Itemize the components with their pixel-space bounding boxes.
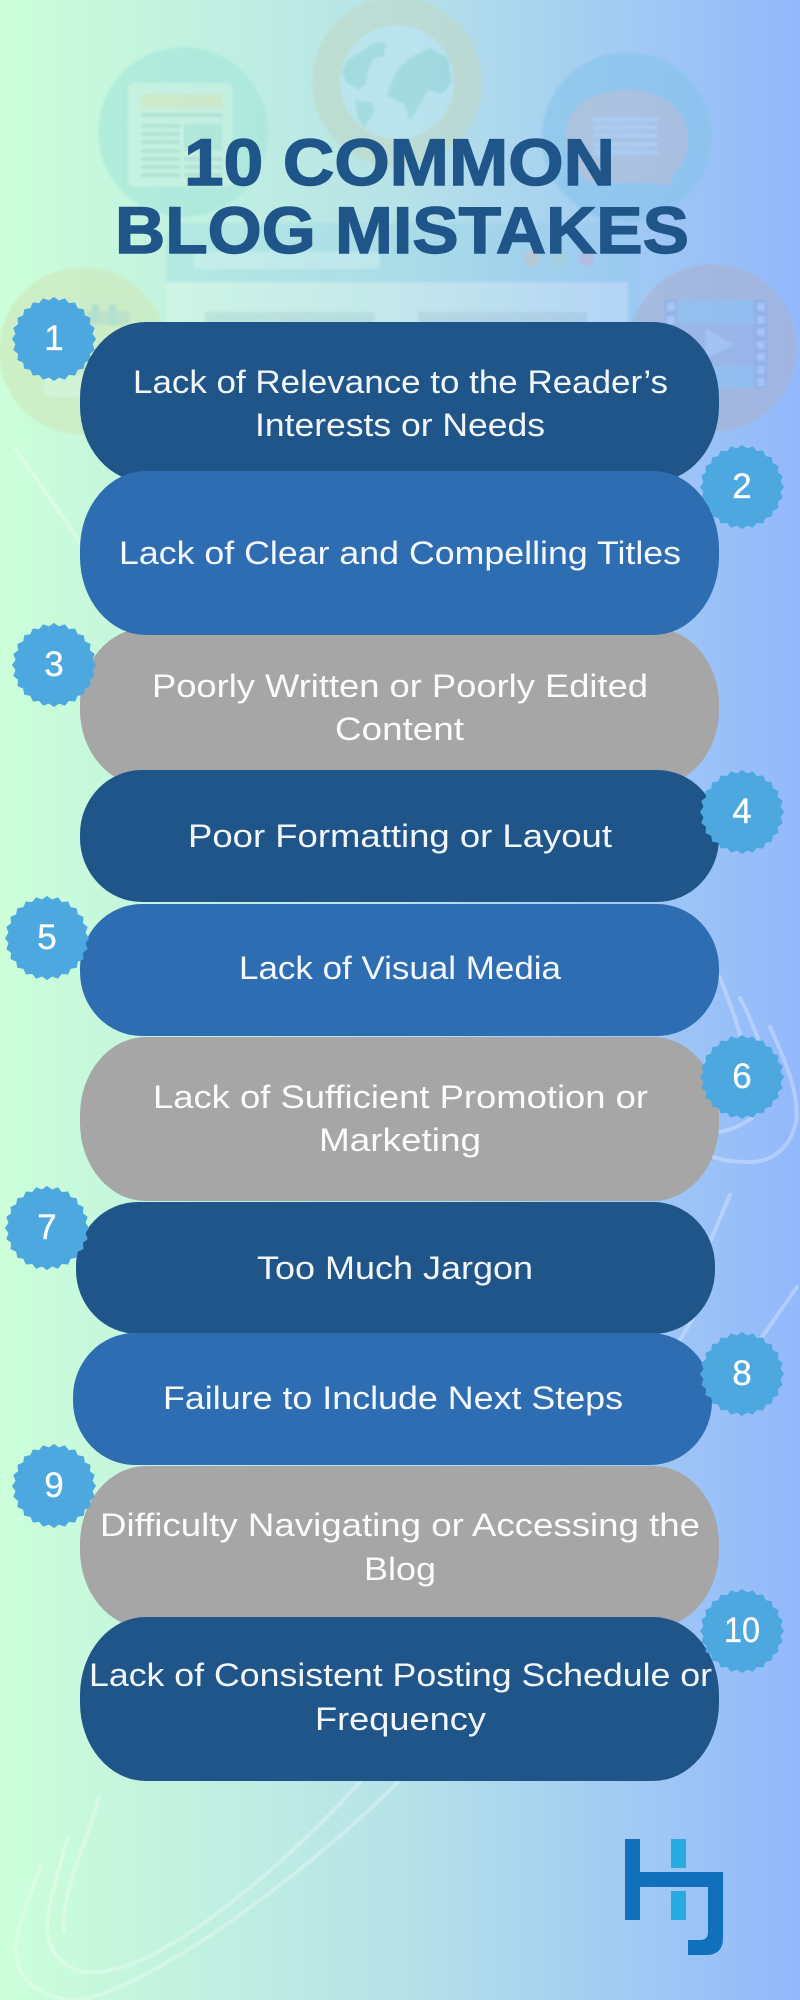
badge 9: 9 xyxy=(44,1466,64,1505)
badge 2: 2 xyxy=(732,467,752,506)
pill 7: jargon xyxy=(76,1202,715,1334)
pill 3: poorly written: Content xyxy=(335,711,464,747)
badge 5 xyxy=(6,896,88,980)
pill 4: formatting: Poor Formatting or Layout xyxy=(188,818,612,854)
pill 1: relevance: Lack of Relevance to the Reader’s xyxy=(133,364,668,400)
title xyxy=(115,125,689,267)
badge 1 xyxy=(12,298,96,380)
background icon: speech and photo circle xyxy=(0,267,167,435)
pill 8: next steps xyxy=(73,1333,712,1465)
badge 4 xyxy=(700,770,784,854)
pill 8: next steps: Failure to Include Next Steps xyxy=(163,1380,623,1416)
pill 6: promotion xyxy=(80,1037,719,1201)
badge 8 xyxy=(700,1332,784,1416)
pill 1: relevance xyxy=(80,322,719,482)
pill 4: formatting xyxy=(80,770,719,902)
badge 5: 5 xyxy=(37,918,57,957)
pill 5: visual media: Lack of Visual Media xyxy=(239,950,561,986)
background icon: browser window xyxy=(166,223,638,332)
pill 10: schedule xyxy=(80,1617,719,1781)
pill 3: poorly written: Poorly Written or Poorly Edited xyxy=(152,668,648,704)
badge 7: 7 xyxy=(37,1208,57,1247)
badge 2 xyxy=(700,446,784,528)
badge 9 xyxy=(12,1444,96,1528)
pill 2: titles xyxy=(80,471,719,635)
badge 10: 10 xyxy=(724,1611,760,1650)
pill 10: schedule: Frequency xyxy=(315,1701,486,1737)
badge 1: 1 xyxy=(44,319,64,358)
badge 8: 8 xyxy=(732,1354,752,1393)
title: 10 COMMON xyxy=(184,125,615,199)
badge 7 xyxy=(6,1186,88,1270)
pill 3: poorly written xyxy=(80,628,719,786)
badge 10 xyxy=(700,1590,784,1672)
logo xyxy=(625,1839,723,1955)
pill 1: relevance: Interests or Needs xyxy=(255,407,545,443)
title: BLOG MISTAKES xyxy=(115,193,689,267)
background swoosh lines xyxy=(15,448,797,2000)
pill 6: promotion: Lack of Sufficient Promotion or xyxy=(153,1079,648,1115)
pill 2: titles: Lack of Clear and Compelling Titles xyxy=(119,535,681,571)
pill 5: visual media xyxy=(80,904,719,1036)
background icon: chat bubble xyxy=(542,52,712,222)
background icon: film strip xyxy=(629,264,797,432)
background icon: globe xyxy=(312,0,482,167)
pill 9: navigation: Blog xyxy=(364,1551,436,1587)
background icon: document xyxy=(98,47,268,217)
pill 6: promotion: Marketing xyxy=(319,1122,481,1158)
badge 6: 6 xyxy=(732,1057,752,1096)
badge 4: 4 xyxy=(732,792,752,831)
pill 7: jargon: Too Much Jargon xyxy=(257,1250,533,1286)
pill 9: navigation xyxy=(80,1466,719,1628)
badge 3: 3 xyxy=(44,645,64,684)
badge 3 xyxy=(12,624,96,706)
pill 9: navigation: Difficulty Navigating or Accessing the xyxy=(100,1507,700,1543)
badge 6 xyxy=(700,1036,784,1118)
pill 10: schedule: Lack of Consistent Posting Schedule or xyxy=(89,1657,712,1693)
